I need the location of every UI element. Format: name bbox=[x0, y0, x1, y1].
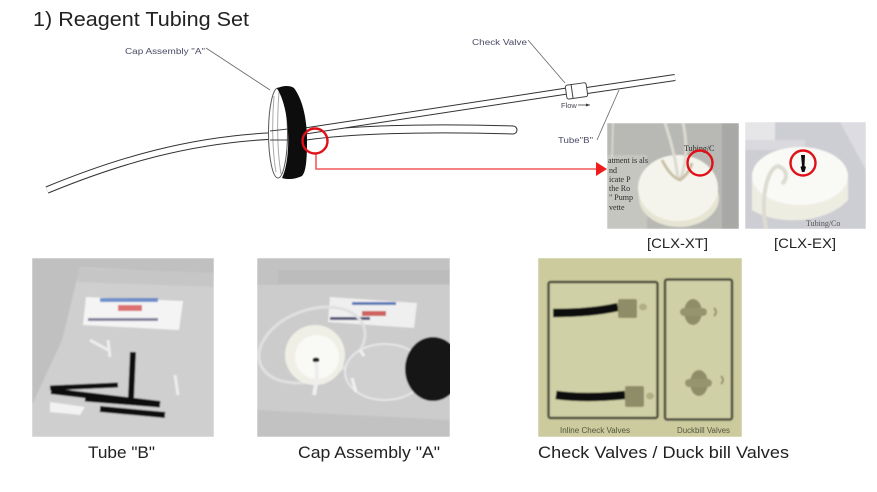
photo: Cap Assembly A bag bbox=[248, 258, 461, 437]
duckbill valves bbox=[684, 299, 702, 325]
cap assembly bbox=[268, 86, 307, 179]
board labels: Inline Check Valves bbox=[560, 426, 630, 435]
title: 1) Reagent Tubing Set bbox=[33, 9, 249, 31]
photo: Tube B bag bbox=[32, 258, 214, 437]
long tube bbox=[305, 78, 675, 131]
label: tube B: Tube"B" bbox=[558, 136, 593, 145]
caption: Tube B: Tube "B" bbox=[88, 444, 155, 462]
board labels: Duckbill Valves bbox=[677, 426, 730, 435]
photo: CLX-XT cap bbox=[607, 123, 739, 229]
bag print text: icate P bbox=[609, 175, 631, 184]
label: check valve: Check Valve bbox=[472, 38, 528, 47]
bag print text: atment is als bbox=[608, 156, 648, 165]
check valve body bbox=[565, 83, 588, 99]
black pin bbox=[800, 155, 806, 172]
board labels bbox=[560, 427, 730, 433]
label: flow arrow: Flow bbox=[561, 101, 577, 110]
red circle: CLX-XT bbox=[688, 150, 712, 176]
photo: CLX-EX cap bbox=[745, 122, 866, 229]
bag print text bbox=[608, 144, 714, 212]
bag print text: Tubing/C bbox=[684, 144, 714, 153]
red callout connector bbox=[302, 128, 607, 176]
caption: Check Valves / Duck bill Valves: Check Valves / Duck bill Valves bbox=[538, 444, 789, 462]
label: flow arrow bbox=[561, 101, 590, 110]
caption: CLX-XT: [CLX-XT] bbox=[647, 235, 708, 251]
bag print text: nd bbox=[609, 166, 617, 175]
short inner tube bbox=[306, 129, 513, 136]
tubing diagram bbox=[47, 38, 675, 190]
bag print text: vette bbox=[609, 203, 625, 212]
inline valves bbox=[553, 307, 618, 313]
label: cap assembly: Cap Assembly "A" bbox=[125, 47, 205, 56]
bag print text: the Ro bbox=[609, 184, 630, 193]
bag print text: " Pump bbox=[609, 193, 633, 202]
caption: Cap Assembly A: Cap Assembly "A" bbox=[298, 444, 440, 462]
left tube bbox=[47, 136, 272, 190]
label: tube B bbox=[558, 90, 619, 145]
photo: Valves board bbox=[538, 258, 742, 437]
red circle: CLX-EX bbox=[790, 150, 816, 176]
label: cap assembly bbox=[125, 47, 270, 90]
label: check valve bbox=[472, 38, 565, 83]
caption: CLX-EX: [CLX-EX] bbox=[774, 235, 836, 251]
bag print: Tubing/Co bbox=[806, 219, 840, 228]
